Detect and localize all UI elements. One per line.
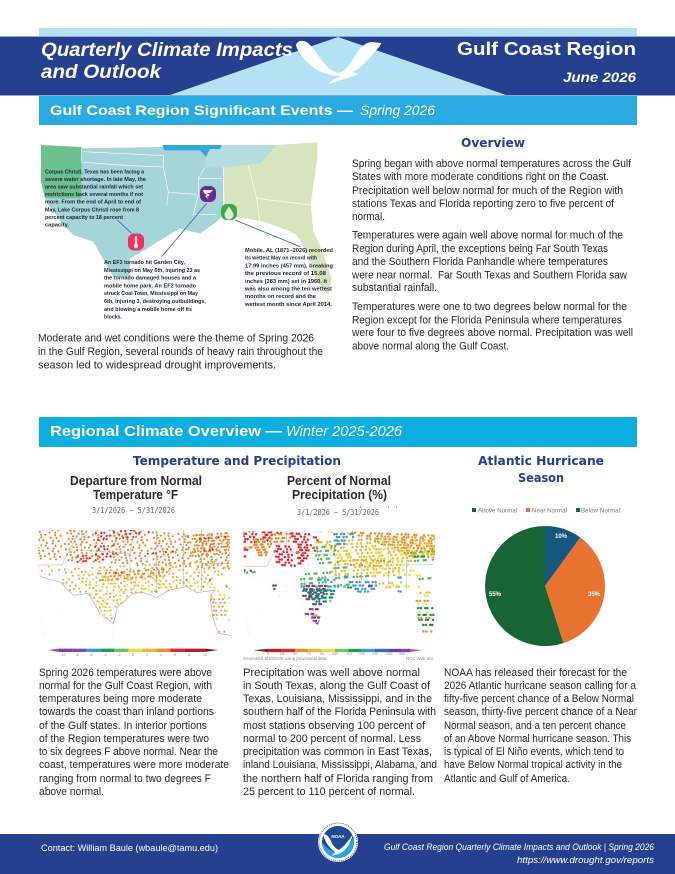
chart title: precipitation percent	[287, 473, 397, 517]
note: Mobile, AL: inches (383 mm) set in 1960. It	[245, 279, 327, 285]
slice labels: 10%	[555, 534, 568, 540]
text block: overview: States with more moderate conditions right on the Coast.	[352, 171, 609, 183]
text block: hurricane outlook: fifty-five percent chance of a Below Normal	[444, 693, 634, 705]
text block: precipitation summary: normal to 200 percent of normal. Less	[243, 733, 421, 745]
chart title: temperature departure: Departure from Normal	[70, 473, 202, 488]
heading: atlantic hurricane season: Season	[518, 470, 564, 485]
map of the region	[41, 142, 332, 295]
note: Mobile, AL: Mobile, AL (1871–2026) recorded	[245, 248, 334, 254]
colour scale: precipitation	[253, 649, 422, 652]
text block: temperature summary	[39, 667, 229, 798]
scale labels: precipitation: 100	[332, 652, 338, 656]
note: tornadoes: struck Coal Town, Mississippi on May	[104, 291, 199, 297]
chart title: precipitation percent: Percent of Normal	[287, 473, 391, 488]
note: Mobile, AL: months on record and the	[245, 294, 316, 300]
title: Quarterly Climate Impacts	[41, 39, 293, 61]
scale labels: temperature: -2	[117, 653, 121, 657]
heading: atlantic hurricane season: Atlantic Hurricane	[478, 453, 604, 468]
note: Mobile, AL: the previous record of 15.08	[245, 271, 326, 277]
text block: precipitation summary: precipitation was common in East Texas,	[243, 746, 432, 758]
text block: temperature summary: temperatures being more moderate	[39, 693, 202, 705]
text block: temperature summary: of the Gulf states. In interior portions	[39, 720, 207, 732]
note: Mobile, AL: was also among the ten wettest	[244, 286, 332, 292]
scale labels: precipitation: 5	[267, 652, 269, 656]
text block: overview: were near normal. Far South Texas and Southern Florida saw	[351, 270, 627, 282]
footnote: precipitation map source	[243, 656, 434, 661]
text block: precipitation summary: the northern half of Florida ranging from	[243, 773, 433, 785]
footer	[0, 822, 675, 874]
note: tornadoes: Mississippi on May 6th, injuring 23 as	[104, 268, 200, 274]
scale labels: temperature: -8	[75, 653, 79, 657]
text block: precipitation summary	[243, 667, 437, 798]
footnote: precipitation map source: Generated 6/10/2026 using provisional data.	[243, 656, 328, 661]
text block: precipitation summary: Texas, Louisiana, Mississippi, and in the	[243, 693, 432, 705]
note: Corpus Christi: Corpus Christi, Texas has been facing a	[45, 169, 145, 175]
heading: atlantic hurricane season	[478, 453, 604, 485]
note: Corpus Christi	[45, 169, 146, 228]
note: Corpus Christi: May, Lake Corpus Christi rose from 8	[45, 207, 139, 213]
text block: overview: Temperatures were one to two degrees below normal for the	[352, 301, 627, 313]
scale labels: precipitation: 150	[372, 652, 378, 656]
scale labels: temperature: 2	[146, 653, 148, 657]
note: Mobile, AL: its wettest May on record with	[245, 256, 317, 262]
report name and link: https://www.drought.gov/reports	[517, 855, 655, 865]
title	[41, 39, 293, 83]
note: tornadoes: the tornado damaged houses and a	[104, 276, 197, 282]
text block: overview: Region except for the Florida Peninsula where temperatures	[352, 314, 623, 326]
region and date: Gulf Coast Region	[457, 38, 636, 59]
scale labels: temperature: -6	[89, 653, 93, 657]
scale labels: precipitation: 25	[280, 652, 284, 656]
heading: overview: Overview	[461, 136, 525, 150]
text block: hurricane outlook: NOAA has released their forecast for the	[444, 667, 627, 679]
chart title: precipitation percent: Precipitation (%)	[292, 487, 387, 502]
slice labels: 55%	[489, 592, 502, 598]
icon: NOAA logo: NOAA	[331, 834, 345, 839]
slice labels: 35%	[588, 592, 601, 598]
scale labels: precipitation	[267, 652, 405, 656]
icon: water drop	[221, 204, 237, 220]
scale labels: temperature: 8	[188, 653, 190, 657]
section bar: regional climate overview	[39, 417, 637, 447]
scale labels: precipitation: 50	[293, 652, 297, 656]
text block: overview: Precipitation well below normal for much of the Region with	[352, 185, 623, 197]
text block: overview: Spring began with above normal temperatures across the Gulf	[352, 158, 632, 170]
text block: overview: normal.	[352, 211, 385, 223]
scale labels: precipitation: 110	[346, 652, 352, 656]
scale labels: temperature: 6	[174, 653, 176, 657]
text block: overview: above normal along the Gulf Coast.	[352, 340, 509, 352]
footnote: precipitation map source: RCC Web Srv	[406, 656, 434, 661]
text block: spring summary: Moderate and wet conditions were the theme of Spring 2026	[38, 332, 314, 344]
scale labels: temperature: 10	[203, 653, 207, 657]
text block: temperature summary: ranging from normal to two degrees F	[39, 773, 212, 785]
scale labels: temperature	[60, 653, 207, 657]
text block: temperature summary: to six degrees F above normal. Near the	[39, 746, 218, 758]
legend: Near Normal	[532, 508, 567, 514]
text block: temperature summary: above normal.	[39, 786, 104, 798]
note: Corpus Christi: percent capacity to 18 percent	[45, 215, 123, 221]
text block: hurricane outlook: Atlantic and Gulf of America.	[444, 773, 570, 785]
chart title: temperature departure	[70, 473, 202, 515]
panel: significant events map	[41, 142, 334, 321]
scale labels: precipitation: 300	[399, 652, 405, 656]
text block: hurricane outlook: 2026 Atlantic hurricane season calling for a	[444, 680, 636, 692]
scale labels: precipitation: 90	[320, 652, 324, 656]
icon: NOAA logo	[318, 822, 358, 862]
section bar: significant events	[39, 96, 637, 125]
text block: spring summary: season led to widespread drought improvements.	[38, 360, 276, 372]
report name and link	[384, 842, 655, 865]
scale labels: temperature: -4	[103, 653, 107, 657]
text block: precipitation summary: in South Texas, along the Gulf Coast of	[243, 680, 430, 692]
slice labels	[489, 534, 601, 598]
text block: hurricane outlook: is typical of El Niño events, which tend to	[444, 746, 624, 758]
slice: near normal	[545, 538, 605, 643]
slice: above normal	[545, 526, 580, 586]
note: tornadoes	[104, 260, 206, 321]
region and date: June 2026	[563, 69, 636, 85]
note: tornadoes: blocks.	[104, 315, 122, 321]
icon: tornado	[200, 186, 216, 202]
note: Corpus Christi: capacity.	[45, 222, 69, 228]
text block: spring summary: in the Gulf Region, several rounds of heavy rain throughout the	[38, 346, 323, 358]
note: Corpus Christi: severe water shortage. In late May, the	[45, 177, 146, 183]
text block: overview: Region during April, the exceptions being Far South Texas	[352, 243, 609, 255]
legend	[472, 508, 620, 514]
text block: overview: substantial rainfall.	[352, 282, 437, 294]
note: Corpus Christi: restrictions back several months if not	[45, 192, 143, 198]
header banner	[0, 28, 675, 96]
title: and Outlook	[41, 61, 162, 83]
note: Mobile, AL	[244, 248, 334, 308]
section bar: significant events: Gulf Coast Region Significant Events —	[50, 102, 353, 118]
text block: overview: and the Southern Florida Panhandle where temperatures	[352, 256, 609, 268]
section bar: regional climate overview: Regional Climate Overview —	[50, 424, 283, 440]
scale labels: precipitation: 130	[359, 652, 365, 656]
text block: hurricane outlook	[444, 667, 637, 785]
chart title: temperature departure: Temperature °F	[93, 487, 178, 502]
text block: precipitation summary: southern half of the Florida Peninsula with	[243, 706, 436, 718]
chart title: precipitation percent: 3/1/2026 – 5/31/2026	[297, 508, 379, 517]
text block: precipitation summary: inland Louisiana, Mississippi, Alabama, and	[243, 759, 437, 771]
text block: precipitation summary: 25 percent to 110 percent of normal.	[243, 786, 415, 798]
text block: temperature summary: of the Region temperatures were two	[39, 733, 209, 745]
text block: spring summary	[38, 332, 323, 372]
text block: hurricane outlook: season, thirty-five percent chance of a Near	[444, 706, 637, 718]
text block: hurricane outlook: Normal season, and a ten percent chance	[444, 720, 626, 732]
scale labels: temperature: 0	[132, 653, 134, 657]
chart title: temperature departure: 3/1/2026 – 5/31/2026	[92, 506, 175, 515]
text block: temperature summary: normal for the Gulf Coast Region, with	[39, 680, 212, 692]
note: Mobile, AL: 17.99 inches (457 mm), breaking	[245, 263, 334, 269]
report name and link: Gulf Coast Region Quarterly Climate Impacts and Outlook | Spring 2026	[384, 842, 654, 852]
note: tornadoes: 6th, injuring 3, destroying outbuildings,	[104, 299, 206, 305]
note: Corpus Christi: area saw substantial rainfall which set	[45, 184, 143, 190]
leader lines	[117, 203, 300, 257]
icon: white bird	[296, 41, 381, 84]
note: Corpus Christi: more. From the end of April to end of	[45, 200, 141, 206]
text block: hurricane outlook: have Below Normal tropical activity in the	[444, 759, 622, 771]
text block: overview	[351, 158, 633, 352]
scale labels: temperature: -10	[60, 653, 66, 657]
slice: below normal	[485, 526, 564, 646]
map: temperature departure stations	[38, 530, 230, 652]
legend: Below Normal	[581, 508, 620, 514]
region and date	[457, 38, 636, 85]
note: tornadoes: mobile home park. An EF2 tornado	[104, 283, 197, 289]
pie chart: hurricane season outlook	[472, 508, 620, 646]
section bar: significant events: Spring 2026	[360, 102, 435, 118]
note: tornadoes: An EF3 tornado hit Garden City,	[104, 260, 185, 266]
section bar: regional climate overview: Winter 2025-2026	[286, 424, 403, 440]
scale labels: temperature: 4	[160, 653, 162, 657]
text block: hurricane outlook: of an Above Normal hurricane season. This	[444, 733, 631, 745]
text block: precipitation summary: most stations observing 100 percent of	[243, 720, 425, 732]
icon: thermometer	[128, 234, 144, 250]
contact: Contact: William Baule (wbaule@tamu.edu)	[41, 843, 218, 854]
note: Mobile, AL: wettest month since April 2014.	[244, 302, 332, 308]
heading: temperature and precipitation: Temperature and Precipitation	[133, 454, 341, 468]
text block: temperature summary: towards the coast than inland portions	[39, 706, 214, 718]
scale labels: precipitation: 70	[307, 652, 311, 656]
text block: temperature summary: coast, temperatures were more moderate	[39, 759, 229, 771]
legend: Above Normal	[478, 508, 517, 514]
colour scale: temperature	[48, 649, 218, 652]
text block: temperature summary: Spring 2026 temperatures were above	[39, 667, 212, 679]
text block: precipitation summary: Precipitation was well above normal	[243, 667, 420, 679]
note: tornadoes: and blowing a mobile home off its	[104, 307, 192, 313]
map: percent of normal precipitation stations	[239, 531, 443, 652]
scale labels: precipitation: 200	[386, 652, 392, 656]
text block: overview: stations Texas and Florida reporting zero to five percent of	[352, 198, 615, 210]
text block: overview: were four to five degrees above normal. Precipitation was well	[351, 327, 633, 339]
text block: overview: Temperatures were again well above normal for much of the	[352, 230, 623, 242]
